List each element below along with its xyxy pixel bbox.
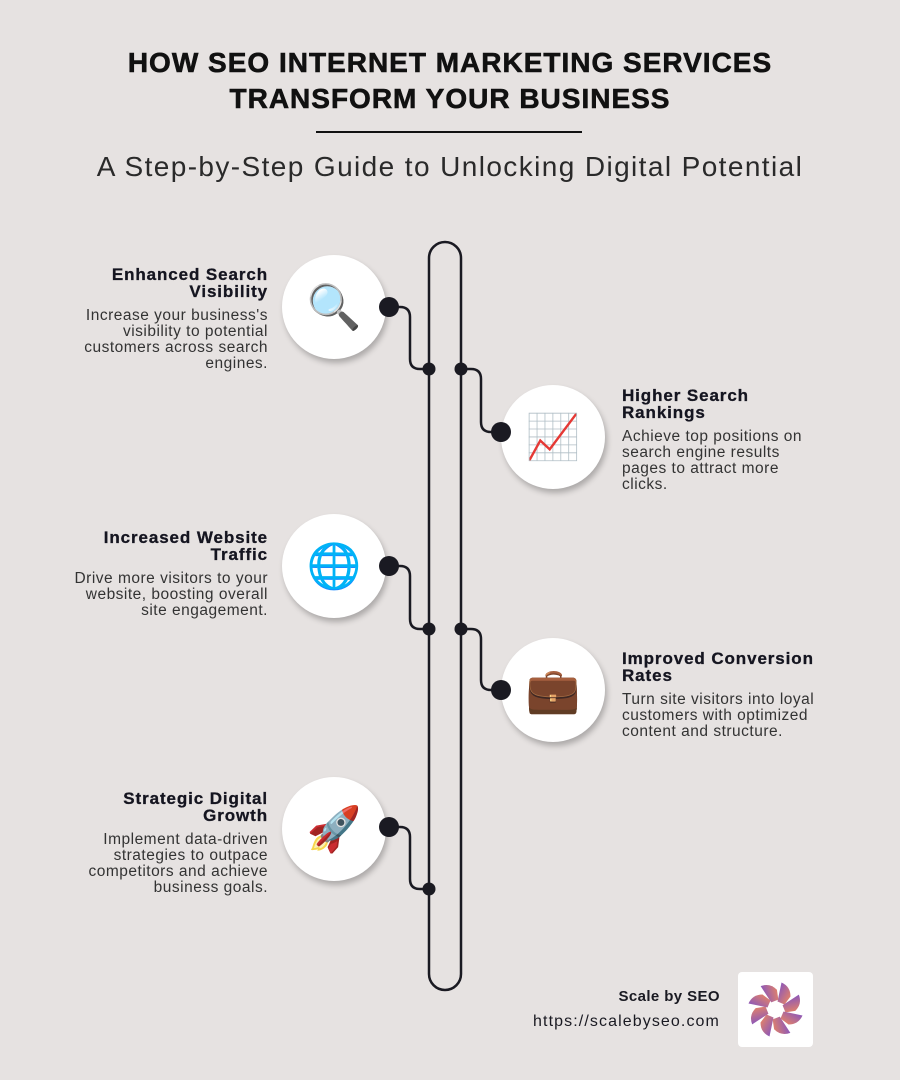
icon circle: briefcase: 💼: [526, 665, 580, 716]
step 4 text: [622, 649, 814, 740]
title: [128, 47, 772, 114]
title: TRANSFORM YOUR BUSINESS: [230, 83, 670, 114]
step 1 text: [84, 265, 268, 372]
icon circle: globe: [282, 514, 386, 618]
step 3 text: Traffic: [211, 545, 268, 564]
icon circle: search: 🔍: [307, 282, 361, 333]
icon circle: globe: 🌐: [307, 541, 361, 592]
divider: [316, 131, 582, 133]
step 5 text: Growth: [203, 806, 268, 825]
logo: [738, 972, 813, 1047]
icon circle: briefcase: [501, 638, 605, 742]
step 4 text: Turn site visitors into loyal customers with optimized content and structure.: [622, 691, 814, 740]
icon circle: search: [282, 255, 386, 359]
step 5 text: [88, 789, 268, 896]
step 1 text: Increase your business's visibility to potential customers across search engines.: [84, 307, 268, 372]
step 2 text: [622, 386, 802, 493]
icon circle: rocket: [282, 777, 386, 881]
step 4 text: Rates: [622, 666, 673, 685]
brand text: https://scalebyseo.com: [533, 1013, 720, 1030]
icon circle: chart: 📈: [526, 412, 580, 463]
title: HOW SEO INTERNET MARKETING SERVICES: [128, 47, 772, 78]
subtitle: A Step-by-Step Guide to Unlocking Digital Potential: [97, 151, 803, 182]
step 3 text: [74, 528, 268, 619]
step 5 text: Implement data-driven strategies to outpace competitors and achieve business goals.: [88, 831, 268, 896]
step 2 text: Rankings: [622, 403, 706, 422]
step 1 text: Enhanced Search: [112, 265, 268, 284]
icon circle: rocket: 🚀: [307, 804, 361, 855]
step 2 text: Higher Search: [622, 386, 749, 405]
icon circle: chart: [501, 385, 605, 489]
brand text: Scale by SEO: [618, 988, 720, 1005]
step 3 text: Drive more visitors to your website, boosting overall site engagement.: [74, 570, 268, 619]
brand text: [533, 988, 720, 1030]
step 2 text: Achieve top positions on search engine results pages to attract more clicks.: [622, 428, 802, 493]
step 4 text: Improved Conversion: [622, 649, 814, 668]
step 5 text: Strategic Digital: [123, 789, 268, 808]
step 1 text: Visibility: [189, 282, 268, 301]
step 3 text: Increased Website: [104, 528, 268, 547]
